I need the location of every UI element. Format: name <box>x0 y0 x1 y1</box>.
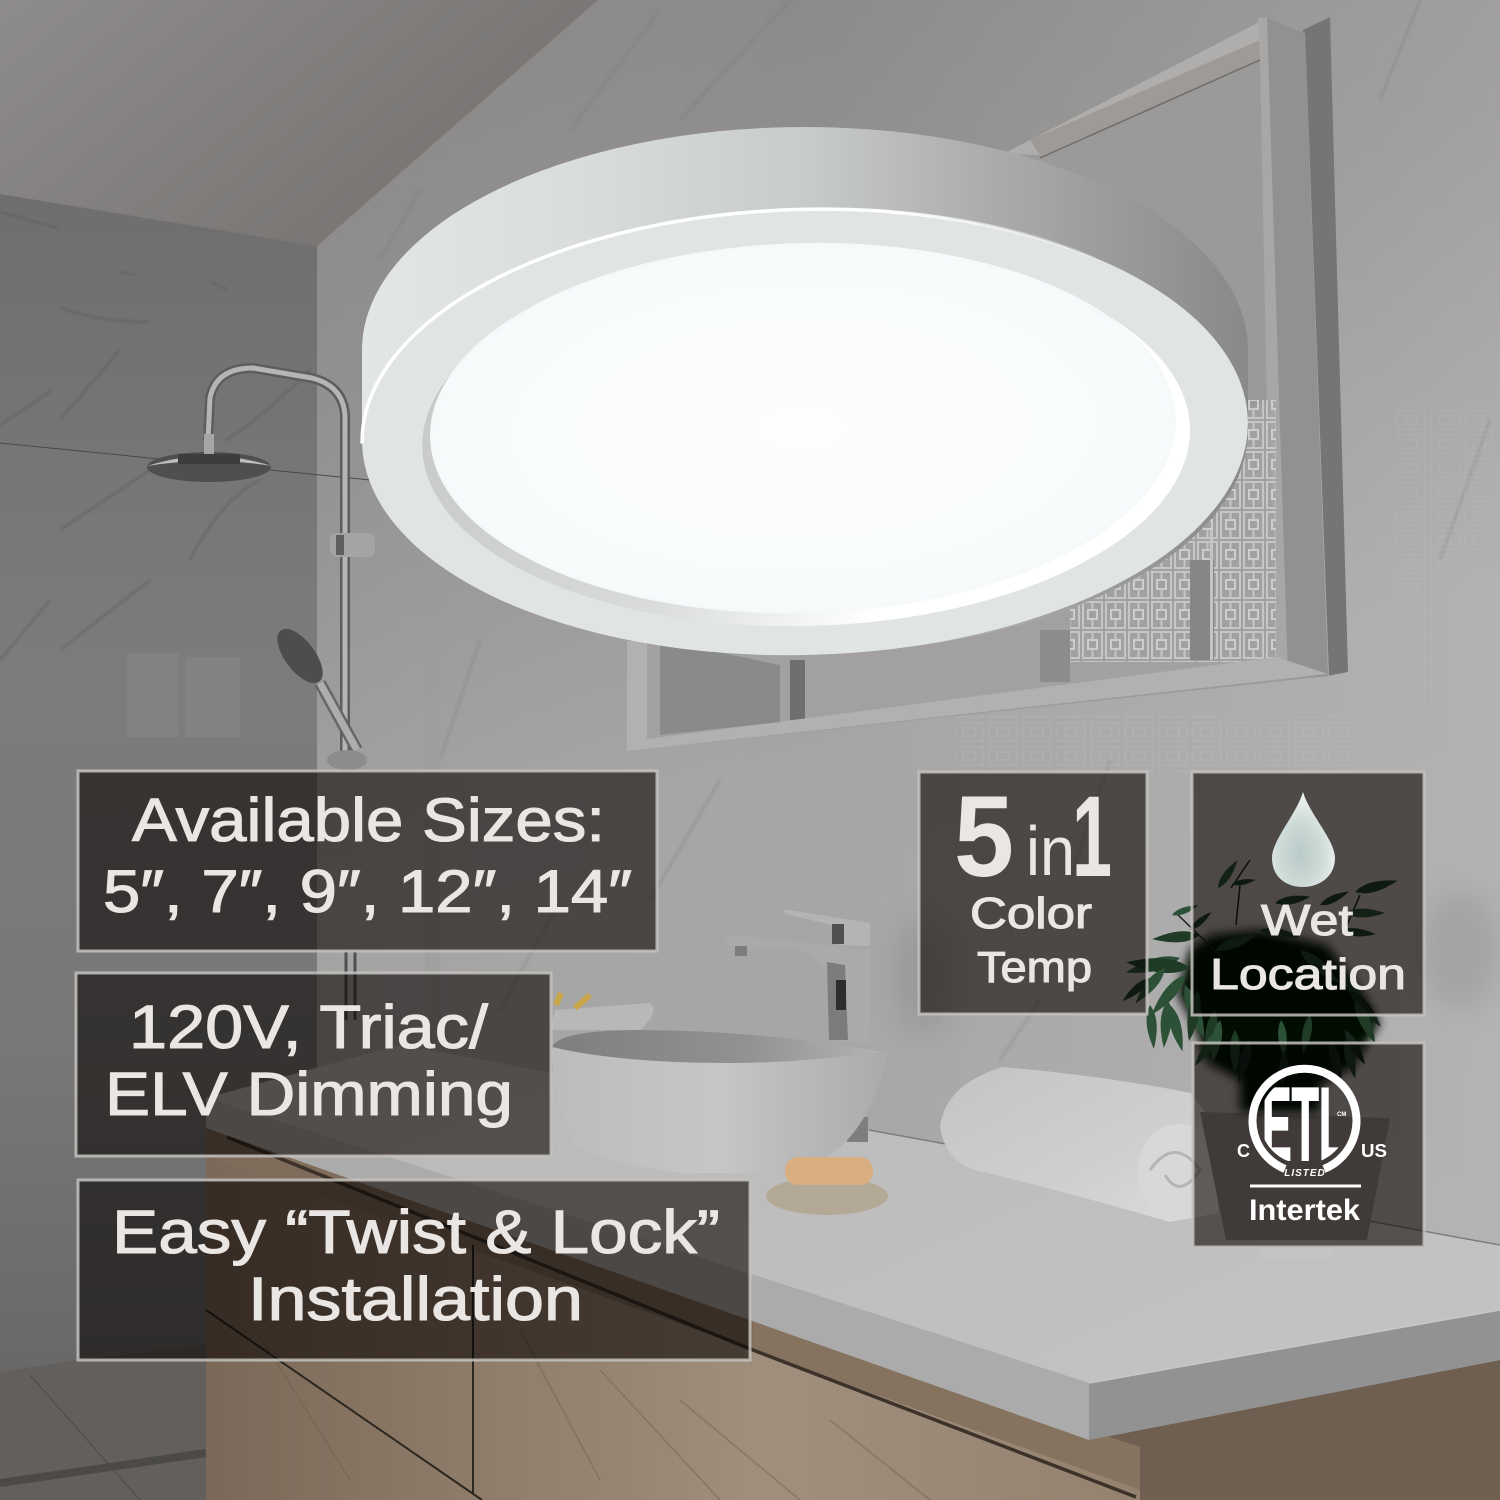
ceiling <box>0 0 598 246</box>
floor <box>0 1345 206 1500</box>
mirror <box>627 17 1348 751</box>
counter and cabinet <box>206 1045 1500 1500</box>
rolled towel <box>940 1067 1218 1222</box>
fixture housing <box>362 127 1248 653</box>
icon: ETL mark <box>1237 1067 1387 1183</box>
panel: wet location <box>1192 772 1424 1015</box>
plant <box>1120 858 1399 1112</box>
faucet <box>723 909 870 1142</box>
plant pot <box>1200 1112 1390 1258</box>
towel behind sink <box>550 993 653 1030</box>
icon: ETL mark: CM <box>1337 1112 1346 1118</box>
panel: 5 in 1 color temp: Temp <box>977 943 1092 992</box>
panel: voltage and dimming: 120V, Triac/ <box>129 993 488 1061</box>
panel: 5 in 1 color temp: in <box>1026 812 1075 890</box>
panel: 5 in 1 color temp: 1 <box>1072 773 1112 901</box>
panel: 5 in 1 color temp: 5 <box>954 773 1014 901</box>
panel: installation <box>78 1180 750 1360</box>
panel: ETL listed certification: Intertek <box>1249 1194 1360 1227</box>
icon: ETL mark: C <box>1237 1141 1250 1161</box>
panel: available sizes: Available Sizes: <box>132 786 605 854</box>
panel: voltage and dimming: ELV Dimming <box>105 1060 513 1128</box>
panel: ETL listed certification <box>1193 1043 1424 1247</box>
panel: installation: Installation <box>248 1265 583 1333</box>
panel: 5 in 1 color temp: Color <box>970 889 1092 938</box>
icon: water drop <box>1272 792 1335 887</box>
fixture face ring <box>356 197 1254 667</box>
shower fixtures <box>147 368 375 1020</box>
panel: wet location: Location <box>1210 950 1406 999</box>
icon: ETL mark: LISTED <box>1284 1168 1326 1179</box>
recessed lens channel <box>417 240 1195 636</box>
light diffuser <box>425 233 1181 623</box>
soap and dish <box>766 1157 888 1215</box>
panel: voltage and dimming <box>76 973 551 1156</box>
product: round LED ceiling light <box>356 127 1254 667</box>
sink basin <box>552 1030 887 1173</box>
panel: available sizes: 5″, 7″, 9″, 12″, 14″ <box>103 858 632 925</box>
panel: wet location: Wet <box>1261 896 1353 945</box>
icon: ETL mark: US <box>1361 1141 1387 1161</box>
icon: ETL mark: ETL <box>1262 1067 1346 1183</box>
left shower wall <box>0 194 440 1400</box>
panel: 5 in 1 color temp <box>919 772 1147 1014</box>
panel: installation: Easy “Twist & Lock” <box>112 1198 720 1266</box>
white edge highlight <box>356 202 1100 444</box>
panel: available sizes <box>78 771 657 951</box>
